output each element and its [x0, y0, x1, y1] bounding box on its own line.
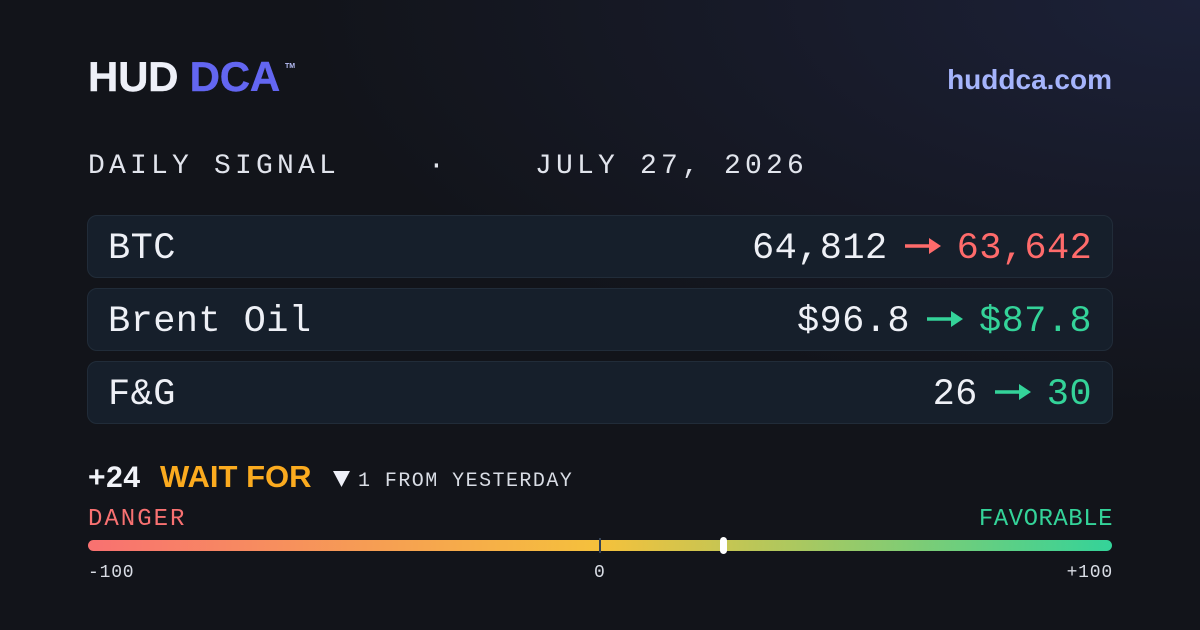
date line: DAILY SIGNAL [88, 151, 340, 182]
zero tick [599, 538, 601, 553]
score: +24 [88, 461, 141, 494]
panel: BTC row [87, 215, 1113, 278]
values: BTC: 64,812 63,642 [752, 228, 1092, 270]
values: Brent Oil: $96.8 $87.8 [797, 301, 1092, 343]
date line [88, 151, 808, 182]
scale min: -100 [88, 563, 134, 583]
logo: HUD DCA [88, 53, 280, 100]
marker [720, 537, 727, 554]
date line: JULY 27, 2026 [535, 151, 808, 182]
danger label: DANGER [88, 506, 186, 533]
signal label: WAIT FOR [160, 459, 312, 494]
label: BTC: BTC [108, 228, 176, 270]
panel: Brent Oil row [87, 288, 1113, 351]
favorable label: FAVORABLE [979, 506, 1113, 533]
date line: · [428, 151, 449, 182]
logo: TM [285, 63, 295, 70]
gauge bar [88, 537, 1112, 554]
label: Brent Oil: Brent Oil [108, 301, 311, 343]
panel: F&G row [87, 361, 1113, 424]
site url: huddca.com [947, 64, 1112, 95]
values: F&G: 26 30 [933, 374, 1092, 416]
scale zero: 0 [594, 563, 605, 583]
label: F&G: F&G [108, 374, 176, 416]
change from yesterday: 1 FROM YESTERDAY [358, 470, 573, 493]
scale max: +100 [1067, 563, 1113, 583]
icon: down triangle [333, 471, 350, 487]
